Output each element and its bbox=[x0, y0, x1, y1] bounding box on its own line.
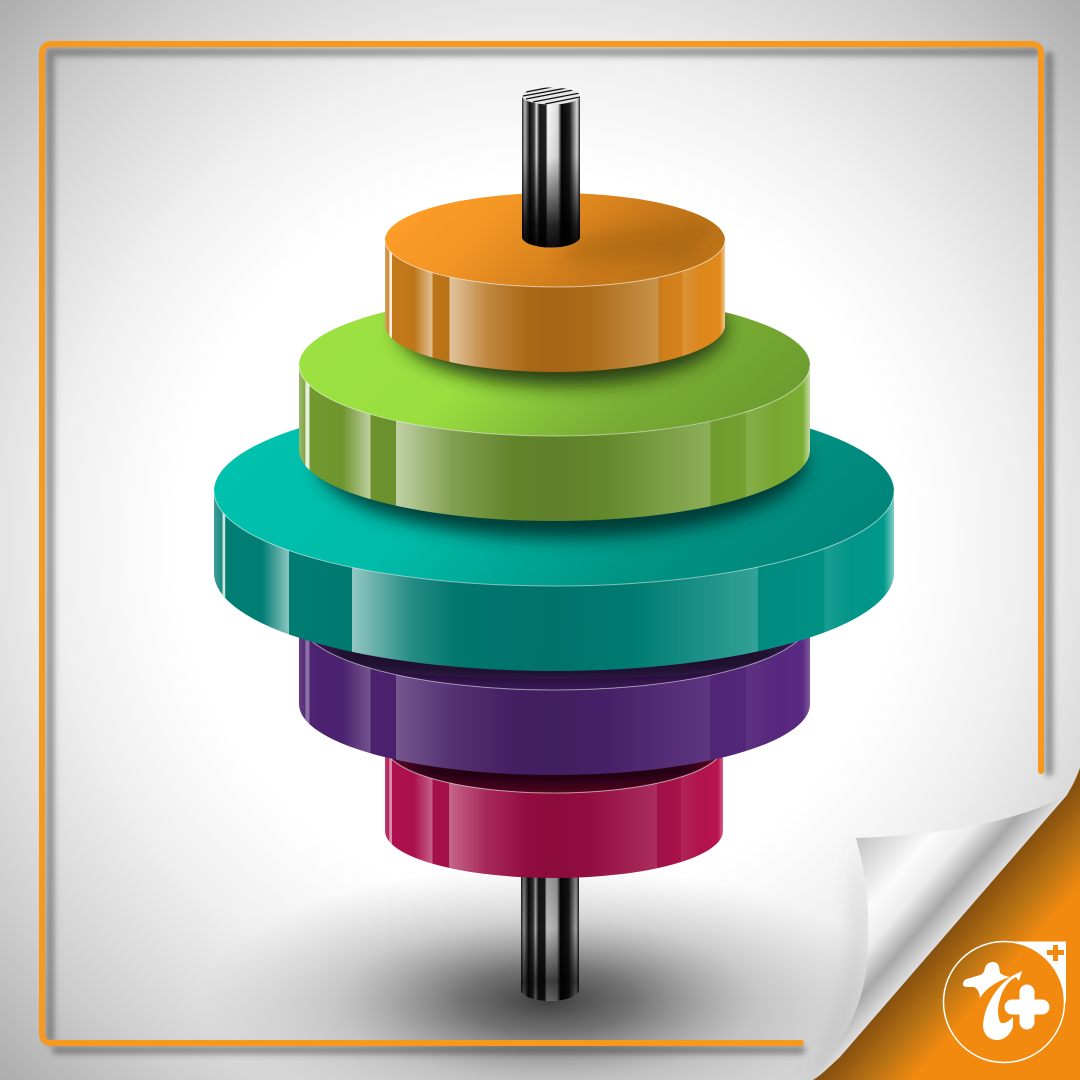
logo badge bbox=[944, 942, 1066, 1062]
lower spindle bbox=[521, 870, 579, 1001]
disc 1: orange bbox=[385, 193, 725, 372]
floor shadow bbox=[198, 865, 898, 1080]
curled paper flap bbox=[813, 795, 1067, 1080]
logo mark bbox=[963, 962, 1042, 1040]
disc 5: crimson bbox=[385, 757, 723, 878]
upper spindle bbox=[522, 85, 580, 248]
disc 2: green bbox=[299, 312, 810, 521]
logo plus badge bbox=[1047, 945, 1064, 961]
disc 4: purple bbox=[299, 548, 810, 775]
disc 3: teal bbox=[214, 386, 894, 671]
orange corner bbox=[813, 768, 1080, 1080]
page curl bbox=[805, 768, 1080, 1080]
